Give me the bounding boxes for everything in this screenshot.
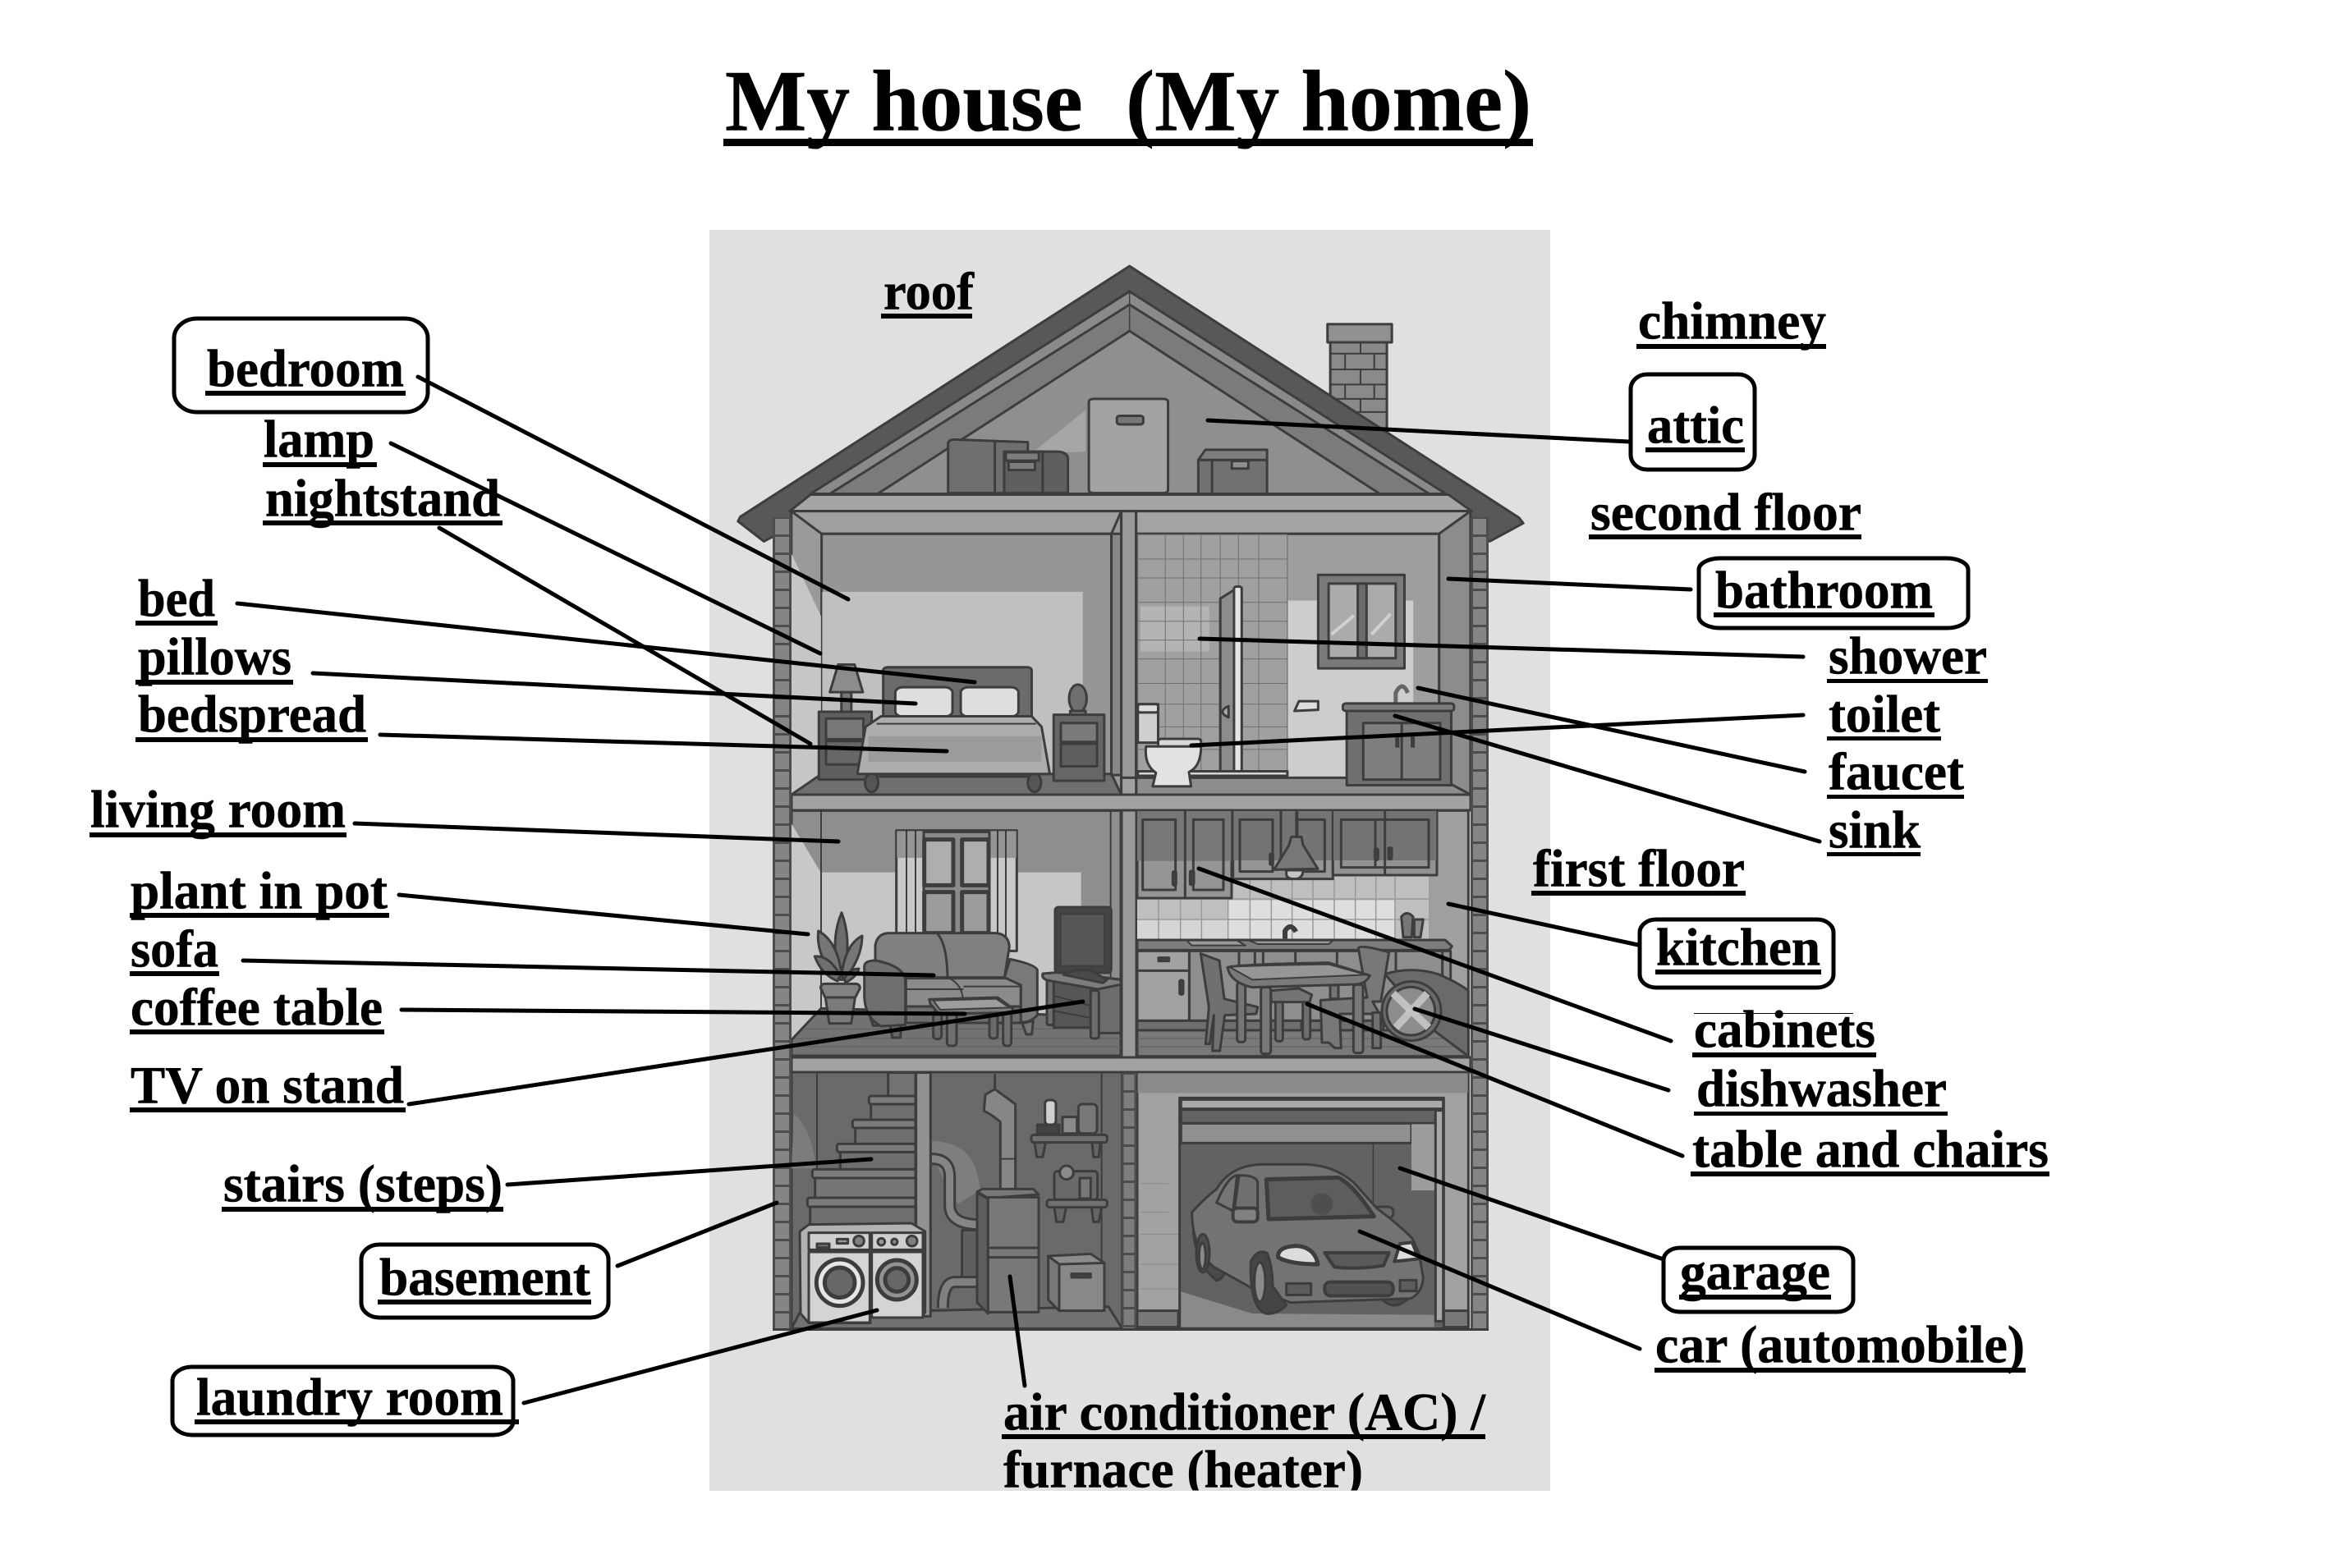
label: coffee table: coffee table [131,979,383,1038]
floor [1136,777,1471,795]
label: car (automobile): car (automobile) [1655,1315,2025,1374]
line: shower [1200,639,1803,657]
label: air conditioner (AC) /: air conditioner (AC) / [1003,1382,1486,1442]
label: shower: shower [1829,627,1987,686]
ceiling beam [790,494,1471,511]
icon: storage box [1049,1254,1104,1311]
left labels [89,319,608,1435]
line: basement [617,1203,777,1266]
line: air conditioner [1010,1277,1025,1386]
attic boxes [948,399,1267,494]
label box: laundry room [172,1367,513,1435]
leader lines [237,377,1820,1403]
line: TV on stand [409,1002,1083,1104]
bedroom [792,511,1122,795]
partition wall [1122,511,1136,795]
icon: laundry machines [800,1223,925,1323]
cabinets [1137,810,1437,898]
icon: sofa [865,933,1037,1038]
icon: plant in pot [815,913,862,1024]
label box: attic [1631,374,1755,470]
line: bedspread [380,735,947,751]
floor [1137,1030,1468,1057]
label: table and chairs: table and chairs [1692,1120,2049,1179]
icon: lamp [830,665,863,713]
icon: car [1192,1164,1423,1314]
label: bedspread: bedspread [138,685,366,744]
line: plant in pot [399,895,808,934]
line: bedroom [418,377,848,599]
garage opening [1180,1098,1443,1328]
line: cabinets [1199,869,1671,1041]
label: faucet: faucet [1829,742,1964,801]
backsplash [1137,876,1430,940]
line: sofa [243,961,934,975]
right labels [1531,292,2049,1374]
label: lamp: lamp [264,410,374,470]
garage [1137,1073,1468,1328]
label: first floor: first floor [1533,839,1745,898]
label: garage: garage [1680,1243,1830,1302]
floor slabs and centre partition [792,795,1471,1072]
label: TV on stand: TV on stand [131,1056,404,1115]
label: bedroom: bedroom [207,340,404,399]
panel: house background [709,230,1550,1491]
icon: furnace and duct [977,1074,1039,1314]
line: car [1360,1231,1640,1349]
house illustration [738,266,1523,1331]
icon: window with curtains [897,831,1017,951]
label box: basement [361,1245,608,1318]
line: stairs [507,1159,871,1185]
line: garage [1400,1168,1661,1259]
living room [792,810,1121,1057]
icon: TV stand [1043,972,1121,1038]
icon: coffee table [929,997,1012,1046]
icon: right nightstand [1053,685,1104,781]
roof [738,266,1523,541]
line: toilet [1191,715,1803,745]
label: living room: living room [90,780,346,839]
line: nightstand [439,528,810,744]
icon: shelves [1031,1100,1107,1222]
line: dishwasher [1415,1009,1668,1090]
icon: left nightstand [819,712,872,780]
line: living room [355,823,838,841]
label: chimney: chimney [1638,292,1826,351]
icon: toilet [1138,704,1201,786]
label box: bedroom [174,319,428,412]
label: basement: basement [379,1248,590,1307]
line: attic [1208,420,1629,442]
title: My house (My home) [725,53,1531,149]
centre labels [881,263,1486,1499]
label: plant in pot: plant in pot [131,862,388,921]
label: nightstand: nightstand [265,470,500,529]
icon: pipes [932,1159,980,1308]
bathroom [1136,511,1471,795]
line: bathroom [1448,579,1691,589]
label: bathroom: bathroom [1715,562,1933,621]
partition repeat [1122,777,1136,795]
icon: stairs [807,1073,916,1225]
line: kitchen [1448,904,1638,945]
label: dishwasher: dishwasher [1696,1059,1947,1118]
icon: pendant lamp [1274,811,1318,879]
icon: chimney [1328,324,1392,433]
label: toilet: toilet [1829,685,1940,744]
shower tiles [1138,534,1287,774]
brick walls [773,517,1489,1331]
line: table and chairs [1307,1004,1682,1156]
stair partition [916,1073,930,1316]
basement [792,1072,1122,1328]
label: sofa: sofa [131,919,218,979]
line: bed [237,603,975,682]
icon: towel holder [1295,701,1318,711]
label: second floor: second floor [1590,483,1861,542]
label: kitchen: kitchen [1656,918,1820,977]
floor [792,1008,1121,1056]
lower cabinets [1137,951,1451,1030]
label: pillows: pillows [138,627,291,686]
label: furnace (heater): furnace (heater) [1003,1440,1363,1499]
upper house: roof, attic and second floor [738,266,1523,795]
line: pillows [313,673,916,704]
line: sink [1395,716,1820,841]
icon: sink cabinet [1343,704,1454,786]
label: sink: sink [1829,801,1921,860]
line: faucet [1418,688,1805,772]
label: laundry room: laundry room [196,1368,503,1427]
icon: bed [857,667,1050,792]
icon: faucet [1396,686,1408,702]
icon: window [1318,575,1405,668]
line: laundry room [524,1310,877,1403]
kitchen [1137,810,1468,1057]
line: lamp [391,443,820,653]
label: roof: roof [883,263,975,322]
icon: table and chairs [1200,947,1389,1054]
icon: dishwasher wheel [1382,970,1468,1057]
counter with sink and pots [1137,913,1452,950]
icon: shower door [1138,587,1287,776]
label: cabinets: cabinets [1694,1000,1875,1059]
label: bed: bed [138,570,215,629]
label box: garage [1664,1248,1853,1312]
icon: TV [1055,907,1111,983]
line: coffee table [402,1010,965,1014]
label box: kitchen [1640,919,1833,988]
label box: bathroom [1699,558,1968,628]
label: attic: attic [1647,396,1744,455]
label: stairs (steps): stairs (steps) [223,1154,503,1213]
